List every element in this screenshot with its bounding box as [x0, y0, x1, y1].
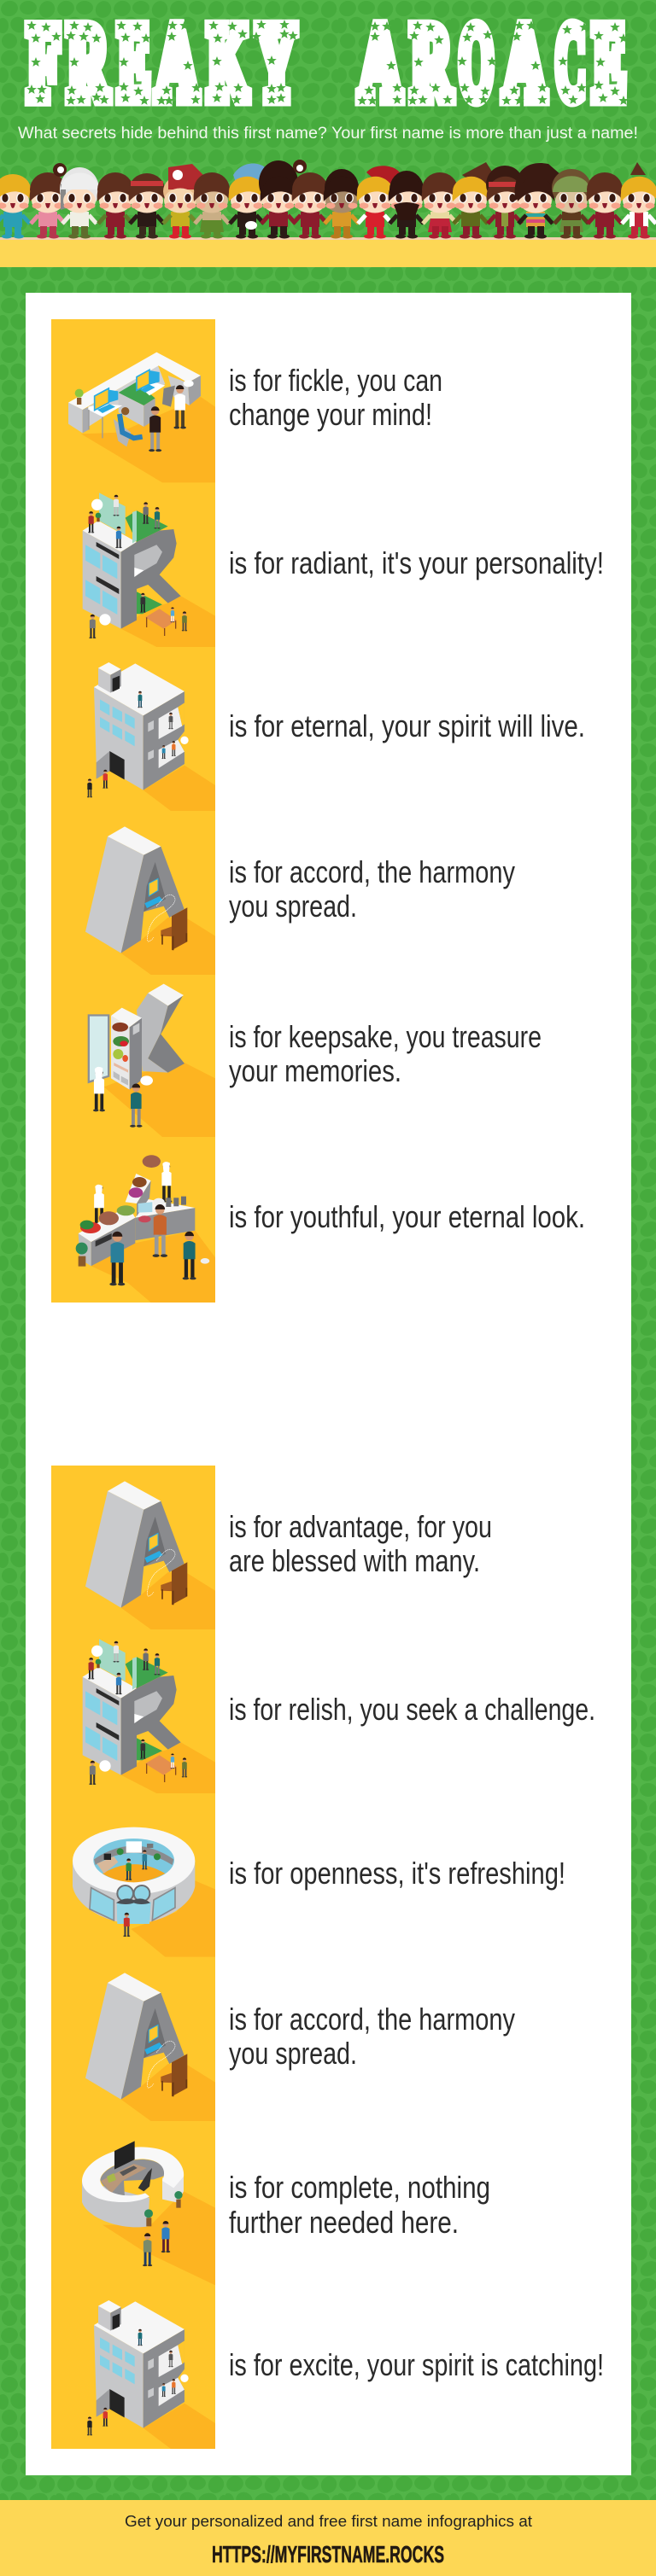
illustration: R building [83, 492, 215, 647]
panel: letter A tile (accord) [51, 1957, 515, 2121]
panel: letter C tile [51, 2121, 490, 2285]
footer text: Get your personalized and free first name infographics at [125, 2513, 532, 2530]
title: E [118, 3, 150, 122]
illustration: E building [87, 2300, 215, 2449]
text: C line: further needed here. [229, 2205, 459, 2240]
panel: letter A tile (second name) [51, 1466, 492, 1629]
text: A line: are blessed with many. [229, 1543, 480, 1578]
text: A line: you spread. [229, 889, 357, 924]
footer url: HTTPS://MYFIRSTNAME.ROCKS [212, 2541, 444, 2567]
illustration: A block with chair [85, 1973, 215, 2121]
panel: letter R tile (second name) [51, 1629, 595, 1793]
yellow band behind characters [0, 237, 656, 267]
panel: letter Y tile [51, 1139, 585, 1303]
illustration: E building [87, 662, 215, 811]
text: K line: is for keepsake, you treasure [229, 1019, 542, 1054]
panel: letter E tile [51, 647, 585, 811]
text: C line: is for complete, nothing [229, 2170, 490, 2205]
title: K [208, 3, 249, 122]
panel: letter E tile (second name) [51, 2285, 604, 2449]
text: A line: is for accord, the harmony [229, 854, 515, 889]
title: R [67, 3, 109, 122]
illustration: office desks forming F [68, 353, 215, 482]
panel: letter R tile [51, 483, 604, 647]
panel: letter K tile [51, 975, 542, 1139]
title [26, 3, 629, 122]
panel: letter F tile [51, 319, 442, 483]
illustration: A block with chair [85, 1481, 215, 1629]
illustration: R building [83, 1639, 215, 1793]
title: A [503, 3, 546, 122]
illustration: K with fridge and chef [88, 984, 215, 1137]
illustration: Y buffet counter with chefs [76, 1155, 215, 1303]
text: E line: is for eternal, your spirit will live. [229, 708, 585, 743]
title: A [359, 3, 401, 122]
text: F line: is for fickle, you can [229, 363, 442, 398]
panel: letter A tile [51, 811, 515, 975]
subtitle: What secrets hide behind this first name? Your first name is more than just a name! [18, 125, 638, 143]
title: A [155, 3, 198, 122]
title: O [459, 3, 494, 122]
illustration: A block with chair [85, 826, 215, 975]
text: F line: change your mind! [229, 397, 432, 432]
illustration: O ring optician shop [73, 1827, 215, 1957]
panel: letter O tile [51, 1793, 565, 1957]
title: F [27, 3, 61, 122]
panel: white card [26, 293, 631, 2475]
title: Y [256, 3, 296, 122]
text: O line: is for openness, it's refreshing! [229, 1856, 565, 1891]
text: A line: is for advantage, for you [229, 1509, 492, 1544]
title: R [411, 3, 453, 122]
title: C [555, 3, 586, 122]
illustration: C reception desk [82, 2141, 215, 2285]
text: K line: your memories. [229, 1053, 401, 1088]
text: A line: you spread. [229, 2036, 357, 2071]
text: Y line: is for youthful, your eternal look. [229, 1199, 585, 1234]
illustration: row of chibi characters [0, 160, 656, 240]
footer panel [0, 2500, 656, 2576]
text: A line: is for accord, the harmony [229, 2002, 515, 2037]
